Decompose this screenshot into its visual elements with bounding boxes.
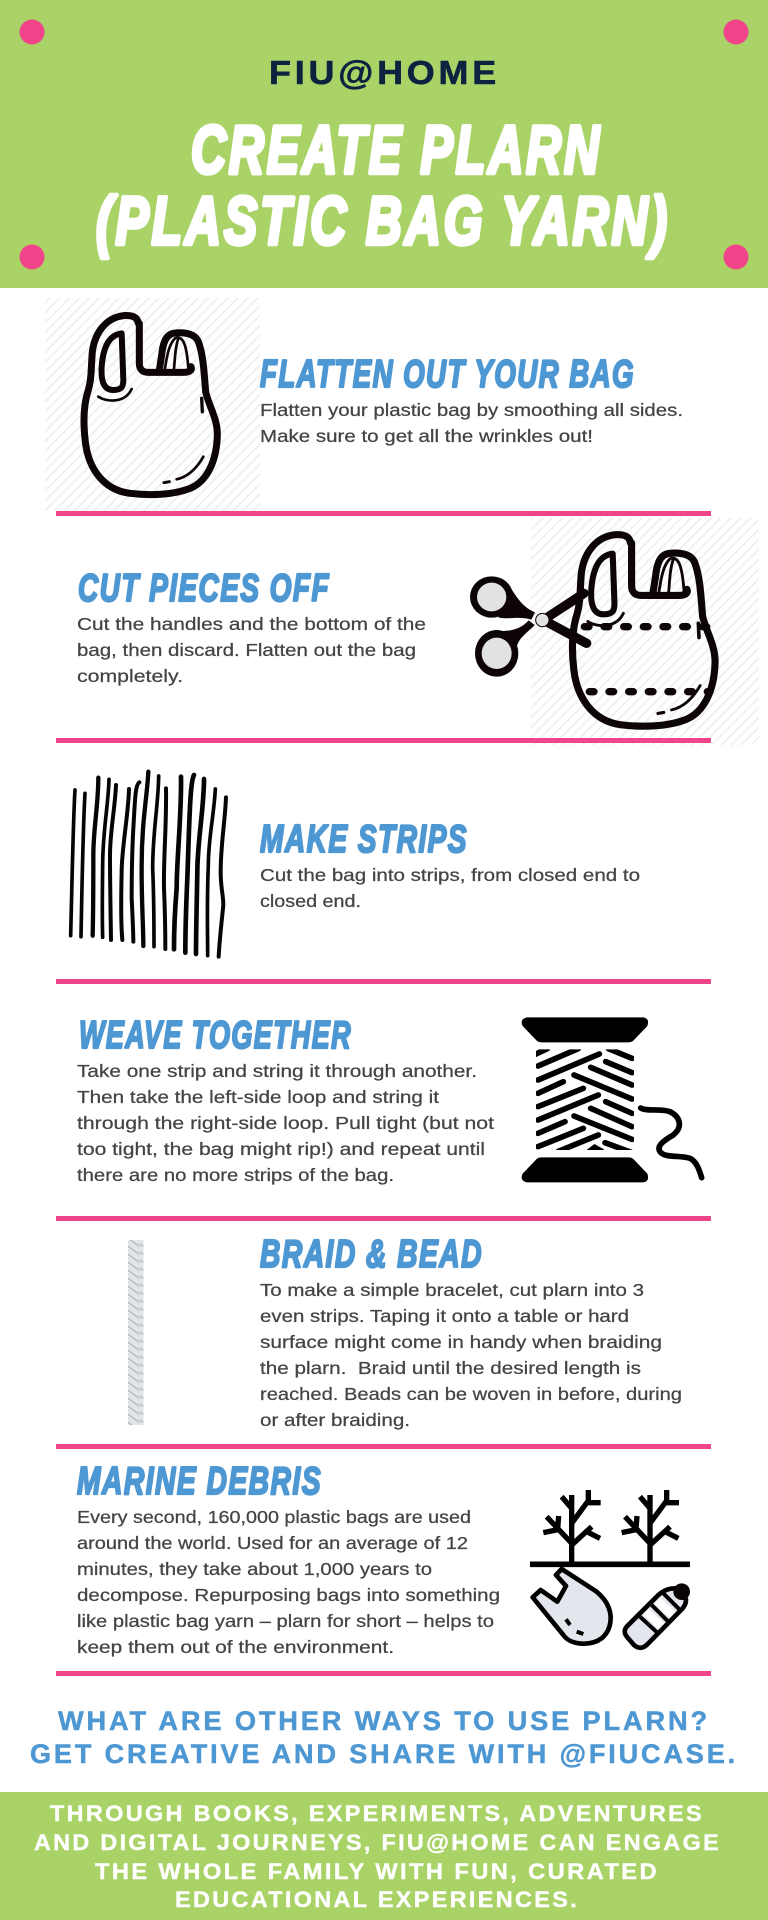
heading: CUT PIECES OFF <box>78 567 330 610</box>
body text: reached. Beads can be woven in before, during <box>260 1384 682 1404</box>
brand name: FIU@HOME <box>269 54 500 91</box>
body text: even strips. Taping it onto a table or hard <box>260 1306 629 1326</box>
body text <box>260 400 683 446</box>
body text <box>77 614 426 686</box>
body text: or after braiding. <box>260 1410 410 1430</box>
hatched backdrop <box>531 518 759 745</box>
header banner <box>0 0 768 288</box>
body text: decompose. Repurposing bags into something <box>77 1585 500 1605</box>
icon: braid <box>128 1240 144 1425</box>
main title: CREATE PLARN <box>191 112 602 188</box>
body text: there are no more strips of the bag. <box>77 1165 394 1185</box>
body text: Cut the handles and the bottom of the <box>77 614 426 634</box>
body text: Take one strip and string it through another. <box>77 1061 477 1081</box>
body text: To make a simple bracelet, cut plarn into 3 <box>260 1280 644 1300</box>
body text: Make sure to get all the wrinkles out! <box>260 426 593 446</box>
icon: thread spool <box>522 1017 702 1182</box>
body text: keep them out of the environment. <box>77 1637 394 1657</box>
footer banner: EDUCATIONAL EXPERIENCES. <box>175 1887 579 1912</box>
body text: surface might come in handy when braiding <box>260 1332 662 1352</box>
footer banner <box>0 1792 768 1920</box>
section: make strips <box>71 772 640 957</box>
heading: BRAID & BEAD <box>260 1233 483 1276</box>
main title <box>96 112 670 259</box>
body text: bag, then discard. Flatten out the bag <box>77 640 416 660</box>
body text <box>77 1061 494 1185</box>
section: braid and bead <box>128 1233 682 1430</box>
body text: Then take the left-side loop and string it <box>77 1087 439 1107</box>
decorative pink dots <box>20 20 748 270</box>
icon: trees, buried bag and bottle <box>530 1490 690 1648</box>
icon: plastic bag <box>84 316 217 495</box>
icon: bag with cut lines <box>572 535 715 726</box>
body text: Flatten your plastic bag by smoothing all sides. <box>260 400 683 420</box>
body text: minutes, they take about 1,000 years to <box>77 1559 432 1579</box>
footer banner: THROUGH BOOKS, EXPERIMENTS, ADVENTURES <box>50 1801 704 1826</box>
call to action <box>30 1706 738 1769</box>
body text: completely. <box>77 666 183 686</box>
heading: WEAVE TOGETHER <box>79 1014 352 1057</box>
call to action: WHAT ARE OTHER WAYS TO USE PLARN? <box>58 1706 710 1736</box>
call to action: GET CREATIVE AND SHARE WITH @FIUCASE. <box>30 1739 738 1769</box>
icon: plastic strips <box>71 772 226 957</box>
body text: like plastic bag yarn – plarn for short – helps to <box>77 1611 494 1631</box>
body text: Every second, 160,000 plastic bags are used <box>77 1507 471 1527</box>
heading: MAKE STRIPS <box>260 818 468 861</box>
body text: the plarn. Braid until the desired length is <box>260 1358 641 1378</box>
section: marine debris <box>77 1460 690 1657</box>
body text <box>260 1280 682 1430</box>
footer banner: THE WHOLE FAMILY WITH FUN, CURATED <box>95 1859 659 1884</box>
heading: MARINE DEBRIS <box>77 1460 322 1503</box>
footer banner: AND DIGITAL JOURNEYS, FIU@HOME CAN ENGAGE <box>34 1830 721 1855</box>
icon: scissors and dashed cut lines <box>470 576 708 692</box>
section: cut pieces off <box>77 518 759 745</box>
body text <box>77 1507 500 1657</box>
body text: through the right-side loop. Pull tight (but not <box>77 1113 494 1133</box>
body text: Cut the bag into strips, from closed end to <box>260 865 640 885</box>
hatched backdrop <box>45 298 260 511</box>
body text <box>260 865 640 911</box>
body text: too tight, the bag might rip!) and repeat until <box>77 1139 485 1159</box>
section: weave together <box>77 1014 702 1185</box>
body text: around the world. Used for an average of 12 <box>77 1533 468 1553</box>
section: flatten out your bag <box>45 298 683 511</box>
body text: closed end. <box>260 891 361 911</box>
